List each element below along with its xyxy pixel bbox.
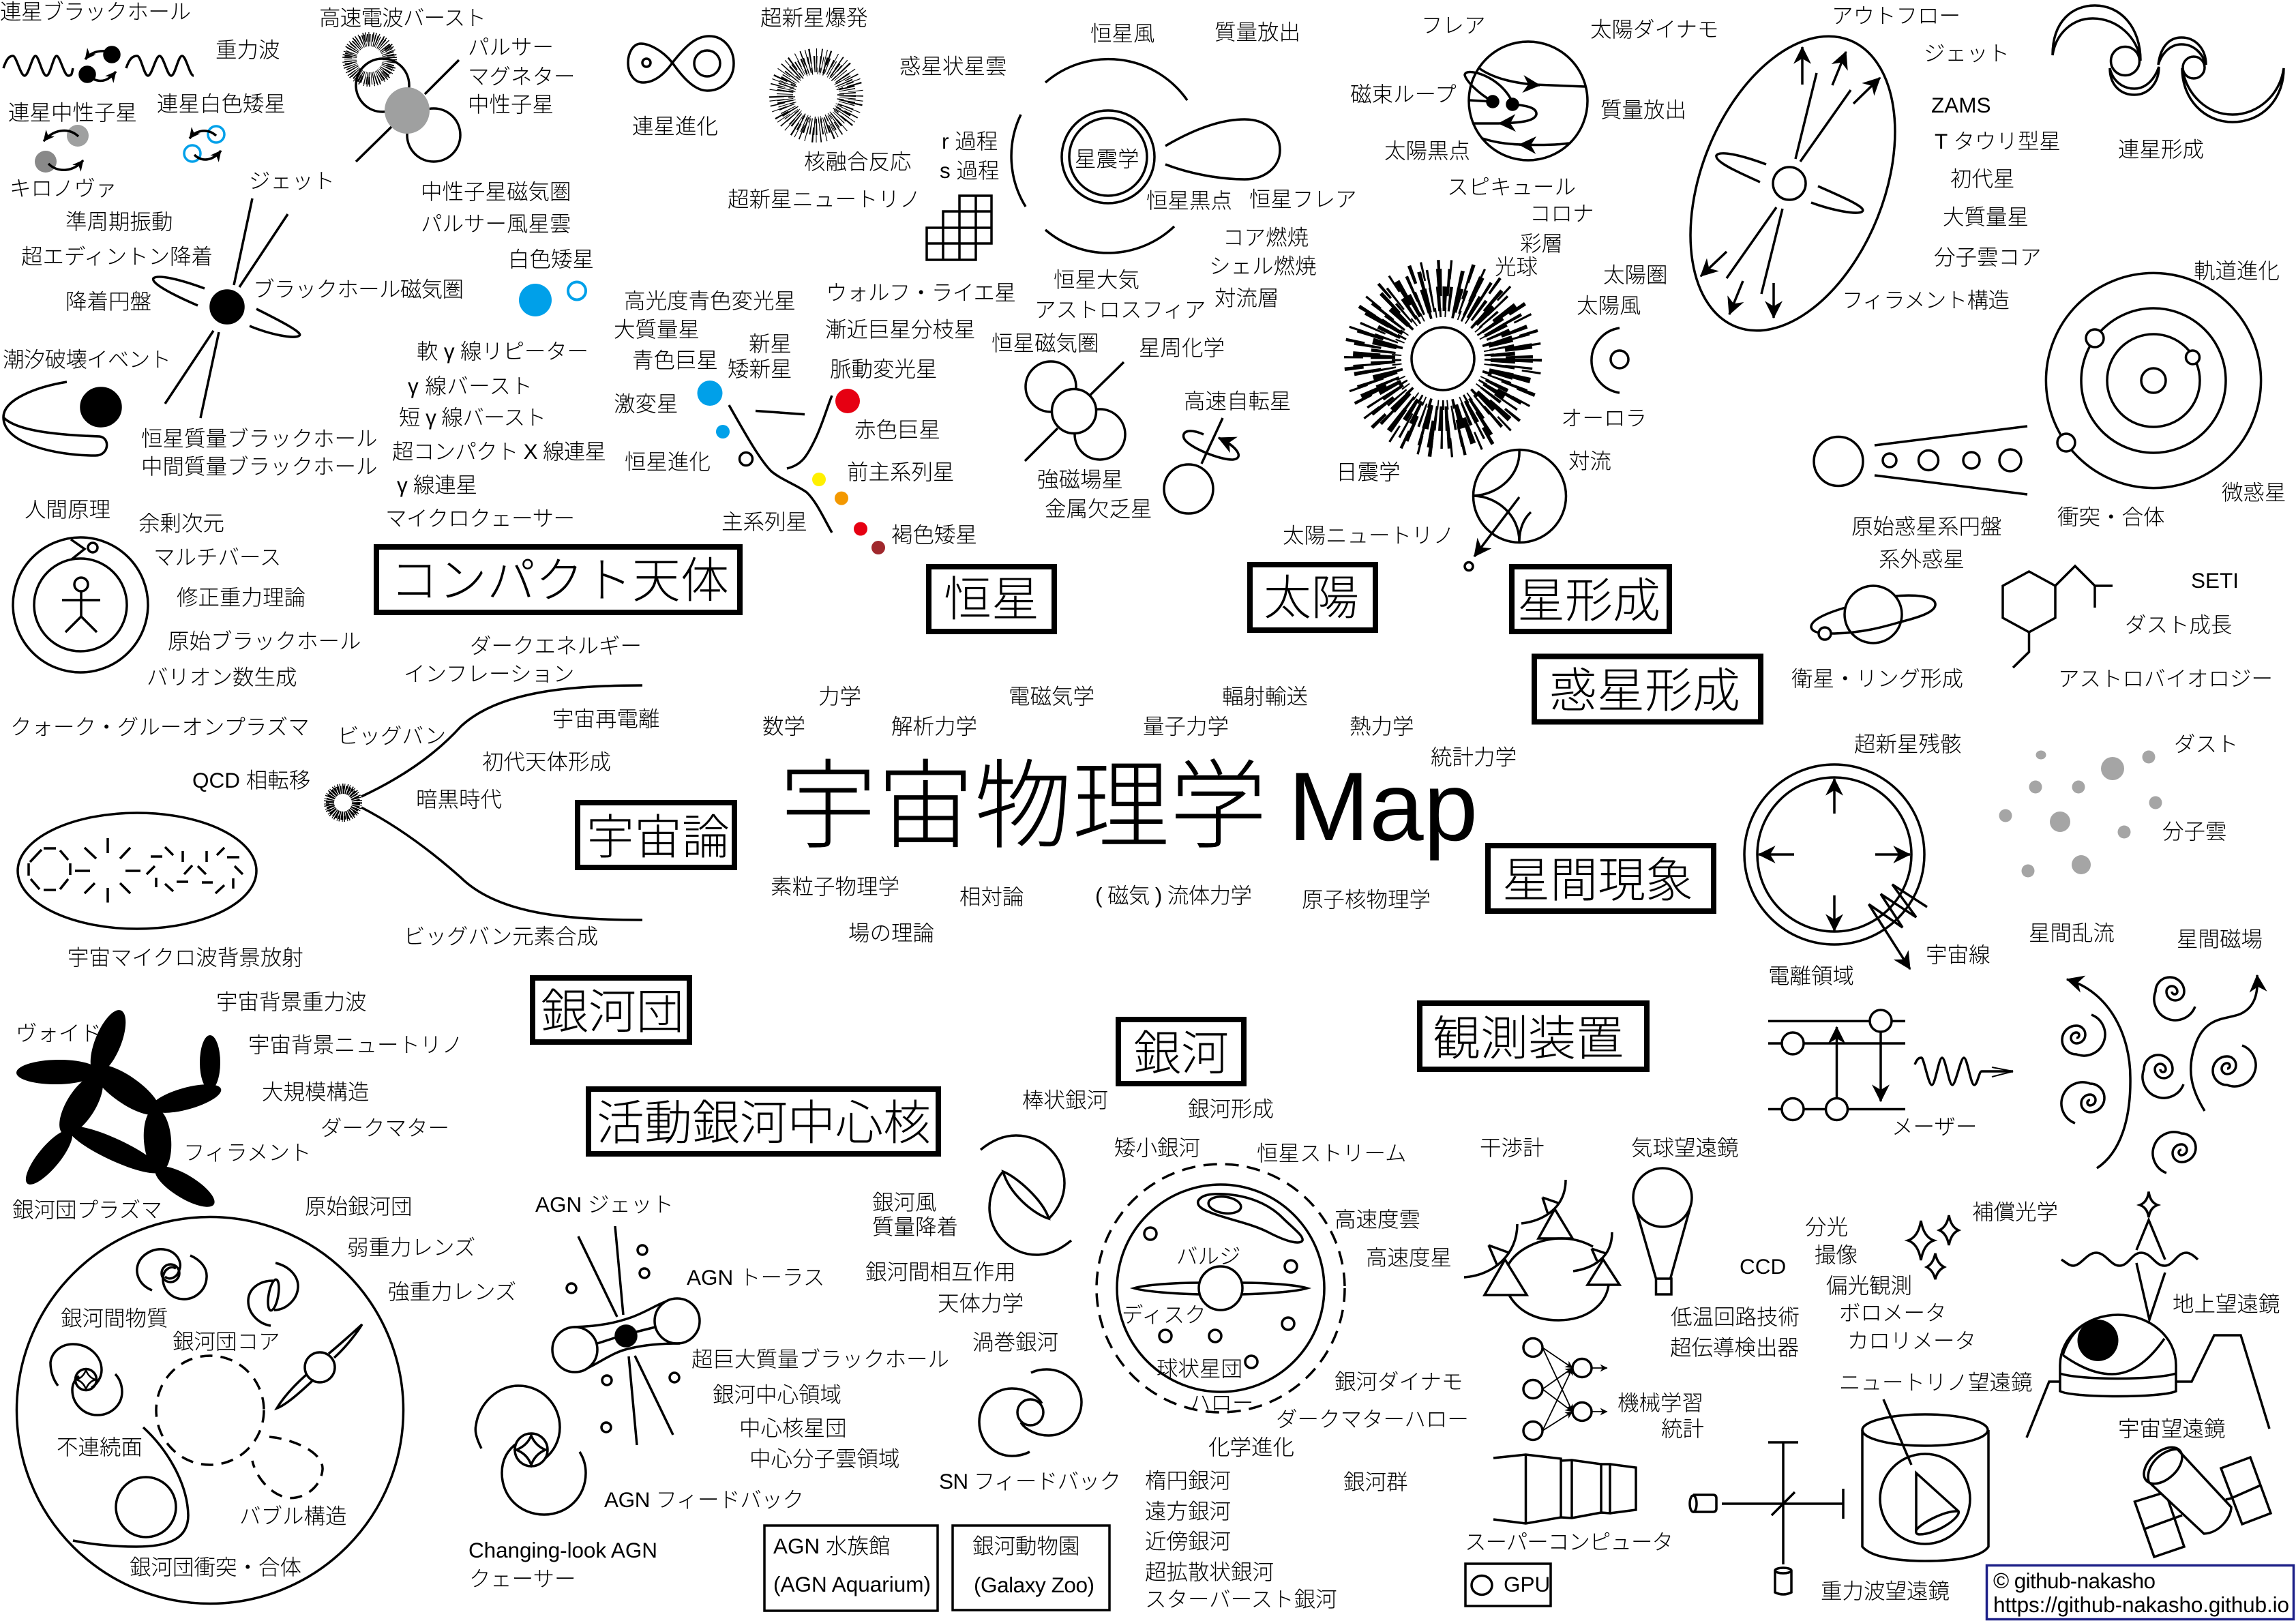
label: AGN jet: AGN ジェット xyxy=(535,1192,674,1217)
callout: GPU: GPU xyxy=(1504,1572,1550,1596)
label: relativity: 相対論 xyxy=(959,884,1024,909)
label: tidal disruption event: 潮汐破壊イベント xyxy=(3,347,171,372)
label: neutron star: 中性子星 xyxy=(468,92,554,117)
icon: supernova remnant and cosmic ray xyxy=(1744,764,1927,969)
label: flare: フレア xyxy=(1421,13,1486,38)
heading: compact objects: コンパクト天体 xyxy=(390,554,729,608)
label: accretion disk: 降着円盤 xyxy=(65,289,151,314)
callout: Galaxy Zoo: (Galaxy Zoo) xyxy=(974,1573,1094,1597)
label: microquasar: マイクロクェーサー xyxy=(385,506,575,531)
label: pulsating variable: 脈動変光星 xyxy=(830,357,938,381)
label: solar wind: 太陽風 xyxy=(1577,293,1641,318)
icon: maser xyxy=(1768,1010,2013,1120)
label: high velocity star: 高速度星 xyxy=(1366,1245,1452,1270)
label: interferometer: 干渉計 xyxy=(1480,1135,1545,1160)
panel: cosmology xyxy=(10,497,734,970)
callout: AGN Aquarium xyxy=(764,1526,938,1611)
label: outflow: アウトフロー xyxy=(1832,3,1960,28)
label: maser: メーザー xyxy=(1892,1114,1977,1139)
label: calorimeter: カロリメータ xyxy=(1847,1328,1976,1353)
label: stellar evolution: 恒星進化 xyxy=(625,449,711,474)
label: baryogenesis: バリオン数生成 xyxy=(147,665,297,689)
callout: credit xyxy=(1987,1566,2294,1619)
label: LBV: 高光度青色変光星 xyxy=(624,288,796,313)
label: Changing-look AGN: Changing-look AGN xyxy=(468,1538,657,1562)
title: 宇宙物理学 xyxy=(779,753,1267,861)
label: circumstellar chemistry: 星周化学 xyxy=(1139,336,1225,360)
label: bulge: バルジ xyxy=(1176,1244,1241,1268)
label: flux loop: 磁束ループ xyxy=(1350,82,1457,106)
label: collision and merger: 衝突・合体 xyxy=(2057,505,2165,529)
label: MHD: ( 磁気 ) 流体力学 xyxy=(1095,883,1252,908)
label: molecular cloud core: 分子雲コア xyxy=(1934,245,2042,269)
label: statistics: 統計 xyxy=(1661,1416,1704,1441)
label: shell burning: シェル燃焼 xyxy=(1209,254,1317,278)
heading: stars: 恒星 xyxy=(944,573,1039,626)
label: mathematics: 数学 xyxy=(762,714,805,739)
chart: HR diagram xyxy=(697,381,885,554)
panel: interstellar phenomena xyxy=(1488,732,2263,1173)
label: spiral galaxy: 渦巻銀河 xyxy=(972,1330,1058,1354)
heading: interstellar phenomena xyxy=(1488,846,1714,911)
label: cryogenic circuits: 低温回路技術 xyxy=(1671,1305,1800,1329)
label: cataclysmic variable: 激変星 xyxy=(614,391,679,416)
label: space telescope: 宇宙望遠鏡 xyxy=(2118,1416,2226,1441)
heading: galaxies: 銀河 xyxy=(1133,1027,1229,1080)
label: dark energy: ダークエネルギー xyxy=(470,634,642,658)
heading: sun: 太陽 xyxy=(1264,571,1359,625)
label: binary neutron star: 連星中性子星 xyxy=(8,100,137,125)
label: pulsar wind nebula: パルサー風星雲 xyxy=(421,211,571,236)
label: aurora: オーロラ xyxy=(1561,406,1647,430)
icon: pulsar xyxy=(356,59,460,162)
label: CCD: CCD xyxy=(1740,1254,1786,1279)
icon: AGN torus and jets xyxy=(552,1226,700,1445)
label: quantum mechanics: 量子力学 xyxy=(1143,714,1229,739)
label: galactic center: 銀河中心領域 xyxy=(713,1382,841,1407)
icon: orbits xyxy=(2046,273,2261,488)
callout: Galaxy Zoo: 銀河動物園 xyxy=(972,1534,1080,1558)
label: stellar stream: 恒星ストリーム xyxy=(1257,1141,1407,1165)
label: interstellar magnetic field: 星間磁場 xyxy=(2177,927,2263,951)
label: strong lensing: 強重力レンズ xyxy=(388,1279,516,1304)
icon: fast rotator xyxy=(1164,418,1238,514)
callout: Galaxy Zoo xyxy=(953,1526,1109,1610)
label: QCD transition: QCD 相転移 xyxy=(192,768,310,792)
label: kilonova: キロノヴァ xyxy=(10,176,117,200)
icon: solar convection with neutrino xyxy=(1465,450,1566,570)
icon: neutrino telescope xyxy=(1862,1399,1988,1561)
label: statistical mechanics: 統計力学 xyxy=(1431,745,1517,769)
heading: star formation: 星形成 xyxy=(1517,574,1660,627)
label: field theory: 場の理論 xyxy=(848,921,934,945)
panel: star formation xyxy=(1512,3,2284,631)
callout: AGN Aquarium: (AGN Aquarium) xyxy=(773,1572,931,1596)
icon: binary evolution xyxy=(628,36,734,91)
panel: stars xyxy=(614,5,1357,631)
heading: galaxy clusters: 銀河団 xyxy=(541,985,684,1039)
label: galaxy interaction: 銀河間相互作用 xyxy=(865,1260,1016,1284)
label: planetesimal: 微惑星 xyxy=(2222,480,2286,505)
label: stellar atmosphere: 恒星大気 xyxy=(1054,267,1139,292)
icon: spiral galaxy xyxy=(979,1369,1082,1456)
label: convection: 対流 xyxy=(1568,449,1611,473)
label: pre-main-sequence star: 前主系列星 xyxy=(847,460,955,484)
label: cluster plasma: 銀河団プラズマ xyxy=(12,1198,162,1222)
label: AGN feedback: AGN フィードバック xyxy=(604,1487,804,1512)
label: binary evolution: 連星進化 xyxy=(632,114,718,138)
label: electromagnetism: 電磁気学 xyxy=(1009,684,1094,709)
label: adaptive optics: 補償光学 xyxy=(1972,1200,2058,1224)
label: AGB star: 漸近巨星分枝星 xyxy=(825,317,976,342)
label: supernova remnant: 超新星残骸 xyxy=(1854,732,1962,756)
label: r-process: r 過程 xyxy=(942,129,998,153)
label: supercomputer: スーパーコンピュータ xyxy=(1465,1530,1673,1554)
label: analytical mechanics: 解析力学 xyxy=(891,714,977,739)
icon: CMB ellipse xyxy=(18,813,256,929)
label: QPO: 準周期振動 xyxy=(65,209,173,234)
heading: instruments: 観測装置 xyxy=(1433,1012,1624,1065)
icon: anthropic principle ouroboros xyxy=(13,537,148,672)
label: molecular cloud: 分子雲 xyxy=(2162,819,2227,844)
label: first stars: 初代星 xyxy=(1950,166,2015,191)
callout: credit: https://github-nakasho.github.io xyxy=(1993,1592,2289,1617)
label: protocluster: 原始銀河団 xyxy=(305,1194,413,1219)
label: filament: フィラメント xyxy=(183,1140,311,1165)
label: cosmic neutrino background: 宇宙背景ニュートリノ xyxy=(248,1032,463,1057)
label: cluster core: 銀河団コア xyxy=(173,1329,280,1354)
icon: big bang universe expansion xyxy=(327,685,642,920)
icon: solar magnetic field xyxy=(1465,42,1587,160)
panel: galaxy clusters xyxy=(12,978,689,1604)
label: void: ヴォイド xyxy=(16,1021,102,1045)
icon: cosmic web filaments xyxy=(16,1006,224,1215)
label: primordial black hole: 原始ブラックホール xyxy=(168,629,361,653)
icon: strong magnetic field star xyxy=(1025,361,1125,461)
heading: cosmology: 宇宙論 xyxy=(586,811,730,864)
label: globular cluster: 球状星団 xyxy=(1157,1356,1242,1381)
label: brown dwarf: 褐色矮星 xyxy=(891,522,977,547)
icon: nuclide grid xyxy=(927,196,992,260)
heading: planet formation: 惑星形成 xyxy=(1549,664,1740,717)
label: dwarf nova: 矮新星 xyxy=(728,357,792,381)
icon: organic molecule xyxy=(2003,566,2113,668)
label: astrosphere: アストロスフィア xyxy=(1034,297,1206,322)
label: gravitational wave telescope: 重力波望遠鏡 xyxy=(1821,1579,1950,1603)
label: nearby galaxy: 近傍銀河 xyxy=(1145,1529,1231,1553)
label: Wolf-Rayet star: ウォルフ・ライエ星 xyxy=(826,280,1016,305)
label: fast radio burst: 高速電波バースト xyxy=(319,5,486,30)
label: nuclear physics: 原子核物理学 xyxy=(1302,887,1431,912)
callout: AGN Aquarium: AGN 水族館 xyxy=(773,1534,891,1558)
label: helioseismology: 日震学 xyxy=(1336,460,1401,484)
label: dwarf galaxy: 矮小銀河 xyxy=(1114,1135,1200,1160)
heading: instruments xyxy=(1420,1003,1647,1069)
label: massive stars: 大質量星 xyxy=(1943,205,2029,229)
callout: GPU xyxy=(1465,1564,1551,1606)
heading: planet formation xyxy=(1534,656,1761,722)
label: multiverse: マルチバース xyxy=(153,545,281,569)
label: interstellar turbulence: 星間乱流 xyxy=(2029,921,2115,945)
label: bubble structure: バブル構造 xyxy=(239,1504,347,1528)
panel: sun xyxy=(1250,13,1718,630)
label: celestial mechanics: 天体力学 xyxy=(938,1291,1024,1315)
icon: space telescope xyxy=(2134,1440,2271,1557)
label: balloon telescope: 気球望遠鏡 xyxy=(1631,1135,1739,1160)
label: cosmic ray: 宇宙線 xyxy=(1926,942,1991,967)
label: weak lensing: 弱重力レンズ xyxy=(347,1235,475,1260)
icon: interferometer array xyxy=(1464,1180,1620,1320)
icon: aurora xyxy=(1592,328,1628,393)
label: solar neutrino: 太陽ニュートリノ xyxy=(1283,523,1455,548)
label: machine learning: 機械学習 xyxy=(1617,1391,1703,1415)
icon: protoplanetary disk xyxy=(1814,426,2027,494)
icon: binary white dwarf xyxy=(184,126,224,162)
label: starspot: 恒星黒点 xyxy=(1146,188,1232,213)
label: blue giant: 青色巨星 xyxy=(632,348,718,372)
label: supernova explosion: 超新星爆発 xyxy=(760,5,868,30)
panel: compact objects xyxy=(0,0,740,612)
label: chromosphere: 彩層 xyxy=(1520,231,1563,256)
label: mechanics: 力学 xyxy=(818,684,861,709)
icon: ground telescope with adaptive optics xyxy=(2027,1192,2269,1438)
icon: Milky Way structure xyxy=(1097,1164,1345,1412)
label: white dwarf: 白色矮星 xyxy=(508,247,594,271)
icon: gravitational waves and binary black hole xyxy=(3,47,194,82)
label: bolometer: ボロメータ xyxy=(1839,1300,1947,1325)
label: ZAMS: ZAMS xyxy=(1931,93,1991,117)
label: CMB: 宇宙マイクロ波背景放射 xyxy=(68,945,303,970)
label: mass accretion: 質量降着 xyxy=(872,1215,958,1239)
label: distant galaxy: 遠方銀河 xyxy=(1145,1499,1231,1523)
label: cluster merger: 銀河団衝突・合体 xyxy=(130,1555,301,1579)
panel: planet formation xyxy=(1534,258,2286,722)
title: Map xyxy=(1288,753,1478,861)
label: ultra compact X-ray binary: 超コンパクト X 線連星 xyxy=(392,439,606,464)
icon: gravitational wave detector xyxy=(1690,1442,1843,1594)
label: s-process: s 過程 xyxy=(940,158,1000,183)
label: inflation: インフレーション xyxy=(404,661,574,686)
label: dark ages: 暗黒時代 xyxy=(416,787,502,812)
label: large-scale structure: 大規模構造 xyxy=(262,1080,370,1104)
label: chemical evolution: 化学進化 xyxy=(1208,1435,1294,1459)
chart: dust and molecular cloud xyxy=(1999,750,2162,877)
label: quasar: クェーサー xyxy=(469,1566,576,1591)
icon: supercomputer xyxy=(1493,1455,1636,1523)
label: pulsar: パルサー xyxy=(468,35,554,59)
icon: tidal disruption xyxy=(3,382,121,456)
heading: galaxies xyxy=(1118,1020,1244,1084)
label: protoplanetary disk: 原始惑星系円盤 xyxy=(1851,514,2002,539)
panel: central physics xyxy=(762,684,1517,945)
label: binary formation: 連星形成 xyxy=(2118,137,2204,162)
label: starburst galaxy: スターバースト銀河 xyxy=(1145,1587,1337,1611)
label: superconducting detectors: 超伝導検出器 xyxy=(1670,1335,1799,1360)
label: core burning: コア燃焼 xyxy=(1223,225,1309,250)
label: stellar mass loss: 質量放出 xyxy=(1214,20,1300,44)
label: solar dynamo: 太陽ダイナモ xyxy=(1590,17,1718,42)
heading: AGN: 活動銀河中心核 xyxy=(597,1097,931,1150)
label: strong magnetic star: 強磁場星 xyxy=(1037,467,1123,492)
label: nuclear star cluster: 中心核星団 xyxy=(739,1416,847,1440)
label: jet: ジェット xyxy=(1924,41,2010,65)
label: jet: ジェット xyxy=(249,168,335,193)
label: convective layer: 対流層 xyxy=(1214,286,1279,310)
label: magnetar: マグネター xyxy=(468,64,576,89)
icon: star with wind arcs xyxy=(1011,59,1280,253)
label: dark matter: ダークマター xyxy=(320,1116,449,1140)
label: black hole magnetosphere: ブラックホール磁気圏 xyxy=(253,277,464,301)
label: SMBH: 超巨大質量ブラックホール xyxy=(691,1347,949,1371)
label: galaxy formation: 銀河形成 xyxy=(1188,1097,1274,1121)
label: intergalactic medium: 銀河間物質 xyxy=(61,1306,168,1330)
label: dust growth: ダスト成長 xyxy=(2125,612,2233,637)
label: elliptical galaxy: 楕円銀河 xyxy=(1145,1468,1231,1493)
label: nova: 新星 xyxy=(749,331,792,356)
label: corona: コロナ xyxy=(1530,201,1594,226)
label: binary black hole: 連星ブラックホール xyxy=(0,0,191,24)
label: photosphere: 光球 xyxy=(1495,254,1538,279)
label: spicule: スピキュール xyxy=(1447,175,1576,199)
label: heliosphere: 太陽圏 xyxy=(1603,263,1668,287)
label: stellar mass black hole: 恒星質量ブラックホール xyxy=(141,426,378,451)
label: thermodynamics: 熱力学 xyxy=(1350,714,1414,739)
label: main-sequence star: 主系列星 xyxy=(721,509,807,534)
label: halo: ハロー xyxy=(1189,1391,1254,1415)
label: solar mass loss: 質量放出 xyxy=(1600,98,1686,122)
label: SN feedback: SN フィードバック xyxy=(939,1469,1121,1493)
label: ionized region: 電離領域 xyxy=(1768,964,1854,988)
panel: observation instruments xyxy=(1420,1003,2294,1619)
heading: stars xyxy=(929,567,1054,631)
label: planetary nebula: 惑星状星雲 xyxy=(899,54,1007,78)
label: astrobiology: アストロバイオロジー xyxy=(2058,666,2273,691)
label: big bang: ビッグバン xyxy=(338,724,446,748)
label: barred galaxy: 棒状銀河 xyxy=(1022,1088,1108,1112)
icon: neural network xyxy=(1523,1338,1607,1440)
label: high velocity cloud: 高速度雲 xyxy=(1335,1207,1420,1232)
label: extra dimensions: 余剰次元 xyxy=(138,511,224,535)
icon: interstellar turbulence swirls xyxy=(2061,975,2257,1173)
icon: twinkling stars xyxy=(1908,1215,1958,1279)
label: SETI: SETI xyxy=(2191,568,2239,593)
label: quark-gluon plasma: クォーク・グルーオンプラズマ xyxy=(10,715,310,739)
label: stellar magnetosphere: 恒星磁気圏 xyxy=(992,331,1099,355)
label: fast rotator: 高速自転星 xyxy=(1184,389,1292,413)
label: intermediate mass black hole: 中間質量ブラックホール xyxy=(141,454,378,479)
label: massive star: 大質量星 xyxy=(614,317,700,342)
callout: credit: © github-nakasho xyxy=(1993,1568,2156,1593)
label: stellar wind: 恒星風 xyxy=(1090,21,1155,46)
label: gamma-ray binary: γ 線連星 xyxy=(397,473,477,497)
icon: fast radio burst xyxy=(347,37,392,82)
label: modified gravity: 修正重力理論 xyxy=(177,585,305,610)
label: particle physics: 素粒子物理学 xyxy=(771,874,899,899)
icon: sun with corona spikes xyxy=(1354,269,1532,448)
label: red giant: 赤色巨星 xyxy=(854,417,940,442)
heading: interstellar phenomena: 星間現象 xyxy=(1502,854,1693,907)
label: first objects: 初代天体形成 xyxy=(482,749,611,774)
icon: AGN feedback galaxy xyxy=(475,1386,586,1515)
label: asteroseismology: 星震学 xyxy=(1075,147,1139,171)
label: dark matter halo: ダークマターハロー xyxy=(1276,1407,1469,1431)
label: ultra diffuse galaxy: 超拡散状銀河 xyxy=(1145,1560,1274,1584)
label: nuclear fusion: 核融合反応 xyxy=(804,149,912,174)
label: gamma-ray burst: γ 線バースト xyxy=(408,374,533,398)
label: galactic wind: 銀河風 xyxy=(872,1190,937,1215)
label: short gamma-ray burst: 短 γ 線バースト xyxy=(399,405,546,430)
label: sunspot: 太陽黒点 xyxy=(1384,138,1470,163)
label: metal-poor star: 金属欠乏星 xyxy=(1045,496,1152,521)
icon: barred galaxy xyxy=(981,1135,1071,1255)
label: satellite and ring formation: 衛星・リング形成 xyxy=(1791,666,1963,691)
label: discontinuity: 不連続面 xyxy=(57,1435,143,1459)
icon: black hole with jets and disk xyxy=(153,198,300,418)
label: neutron star magnetosphere: 中性子星磁気圏 xyxy=(421,179,571,204)
label: galactic dynamo: 銀河ダイナモ xyxy=(1335,1369,1463,1394)
label: polarimetry: 偏光観測 xyxy=(1826,1273,1912,1298)
label: exoplanet: 系外惑星 xyxy=(1879,547,1965,571)
label: big bang nucleosynthesis: ビッグバン元素合成 xyxy=(404,924,598,949)
icon: supernova burst xyxy=(777,56,856,135)
label: ground telescope: 地上望遠鏡 xyxy=(2173,1292,2280,1316)
label: imaging: 撮像 xyxy=(1815,1243,1858,1267)
icon: binary neutron star xyxy=(35,125,89,173)
label: T Tauri star: T タウリ型星 xyxy=(1935,129,2061,153)
label: anthropic principle: 人間原理 xyxy=(25,497,110,522)
label: gravitational wave background: 宇宙背景重力波 xyxy=(216,990,367,1014)
label: supernova neutrino: 超新星ニュートリノ xyxy=(728,187,921,211)
label: gravitational wave: 重力波 xyxy=(215,38,280,62)
label: filament structure: フィラメント構造 xyxy=(1842,288,2010,312)
label: reionization: 宇宙再電離 xyxy=(552,707,660,731)
label: neutrino telescope: ニュートリノ望遠鏡 xyxy=(1839,1370,2033,1395)
label: spectroscopy: 分光 xyxy=(1805,1215,1848,1239)
label: soft gamma repeater: 軟 γ 線リピーター xyxy=(417,339,588,363)
label: galaxy group: 銀河群 xyxy=(1343,1470,1408,1494)
label: dust: ダスト xyxy=(2174,732,2239,756)
panel: galaxies xyxy=(865,1020,1469,1611)
icon: galaxy cluster xyxy=(16,1217,404,1604)
label: orbital evolution: 軌道進化 xyxy=(2194,258,2280,283)
panel: AGN xyxy=(468,1089,949,1611)
icon: binary formation xyxy=(2053,5,2284,122)
label: central molecular zone: 中心分子雲領域 xyxy=(749,1446,900,1471)
icon: white dwarf xyxy=(519,282,586,316)
label: AGN torus: AGN トーラス xyxy=(687,1265,824,1290)
icon: ringed planet xyxy=(1811,586,1935,643)
icon: protostar with outflow xyxy=(1651,6,1935,361)
icon: balloon telescope xyxy=(1633,1168,1692,1294)
heading: sun xyxy=(1250,565,1375,630)
label: radiative transfer: 輻射輸送 xyxy=(1222,684,1308,709)
label: binary white dwarf: 連星白色矮星 xyxy=(157,91,286,116)
label: stellar flare: 恒星フレア xyxy=(1249,187,1357,211)
label: super-Eddington accretion: 超エディントン降着 xyxy=(21,244,213,269)
label: disk: ディスク xyxy=(1122,1303,1206,1327)
